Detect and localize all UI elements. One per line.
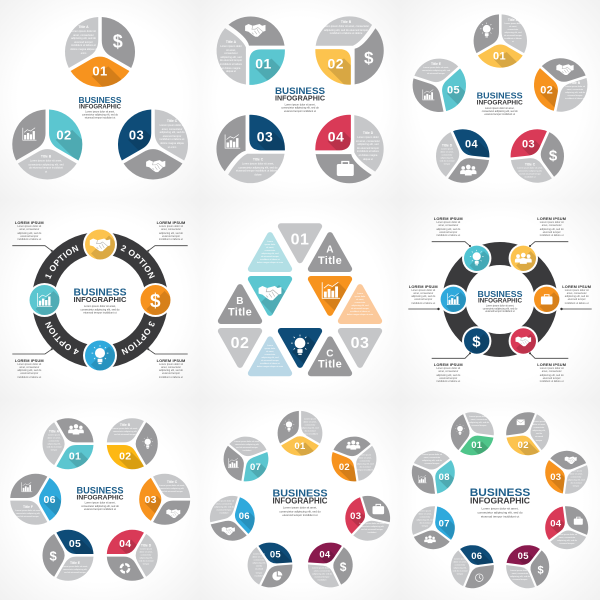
ring labels: 1 OPTION <box>45 245 79 280</box>
circle 01 <box>437 399 515 486</box>
label top left: LOREM IPSUM <box>434 216 463 221</box>
text: sector 2: Lorem ipsum dolor sit amet, consectetur adipiscing elit, sed do eiusmod tempor incididunt <box>356 455 373 472</box>
heading <box>272 489 328 517</box>
heading: INFOGRAPHIC <box>76 494 124 501</box>
circle 01: 01 <box>493 51 506 63</box>
circle 02 <box>311 419 399 509</box>
circle 01: 01 <box>471 440 483 451</box>
text: orange triangle: adipiscing elit, sed <box>352 305 368 307</box>
label left: Lorem ipsum dolor sit amet, consectetur adipiscing elit, sed do eiusmod tempor incididunt ut labore et <box>411 288 435 305</box>
text: Title A: Title A <box>226 40 236 44</box>
label left: LOREM IPSUM <box>409 284 438 288</box>
triangle A: Title <box>318 255 342 267</box>
text: orange triangle <box>347 292 373 316</box>
label bottom left: Lorem ipsum dolor sit amet, consectetur adipiscing elit, sed do eiusmod tempor incididunt ut labore et <box>17 362 41 379</box>
triangle light blue <box>251 339 289 373</box>
heading <box>275 86 325 113</box>
text: blue triangle: ipsum dolor <box>265 348 275 350</box>
label bottom right: LOREM IPSUM <box>537 362 566 367</box>
text: blue triangle: incididunt ut labore et <box>260 363 280 365</box>
heading: INFOGRAPHIC <box>477 100 523 107</box>
heading <box>478 289 523 313</box>
triangle light orange <box>341 287 379 321</box>
node: dollar <box>140 283 170 317</box>
text: Title B: Title B <box>341 20 351 24</box>
text: Title C: Lorem ipsum dolor sit amet, consectetur adipiscing elit, sed do eiusmod tempor incididunt ut <box>517 168 543 178</box>
text: Title D: Lorem ipsum dolor sit amet, consectetur adipiscing elit, sed do eiusmod tempor incididunt ut labore et dolore magna aliqua ut <box>356 136 380 160</box>
heading: Lorem ipsum dolor sit amet, <box>283 506 317 510</box>
label bottom left <box>15 358 44 379</box>
text: Title A: Lorem ipsum dolor sit amet, consectetur adipiscing elit, sed do eiusmod tempor incididunt ut labore et dolore magna aliqua ut enim <box>70 30 97 54</box>
circle 03: 03 <box>350 511 361 522</box>
text: teal triangle <box>257 240 283 264</box>
heading: BUSINESS <box>478 289 523 299</box>
text: orange triangle: do eiusmod tempor <box>351 308 369 310</box>
circle 01: 01 <box>255 56 272 72</box>
text: Title C: Title C <box>167 119 177 123</box>
label top left <box>15 220 44 241</box>
heading: INFOGRAPHIC <box>272 496 328 505</box>
text: teal triangle: ipsum dolor <box>265 244 275 246</box>
heading <box>78 96 122 119</box>
heading: Lorem ipsum dolor sit amet, <box>84 304 116 308</box>
heading: eiusmod tempor incididunt ut <box>481 514 519 518</box>
ring labels <box>45 245 155 355</box>
heading: eiusmod tempor incididunt ut <box>83 311 117 315</box>
circle 04 <box>315 115 384 183</box>
diagram: five circles <box>412 14 588 183</box>
heading: INFOGRAPHIC <box>478 298 522 305</box>
circle 03 <box>339 485 401 553</box>
text: Title E <box>62 561 88 574</box>
text: Title C: Lorem ipsum dolor sit amet, consectetur adipiscing elit, sed do eiusmod tempor incididunt ut labore et dolore magna aliqua ut enim <box>160 124 184 148</box>
text: orange triangle: Lorem <box>357 293 363 295</box>
circle 03: 03 <box>550 472 561 483</box>
circle 02: 02 <box>339 462 350 473</box>
node: bulb <box>83 340 117 370</box>
text: sector 5: Lorem ipsum dolor sit amet, consectetur adipiscing elit, sed do eiusmod tempor incididunt <box>252 554 266 577</box>
label top left: Lorem ipsum dolor sit amet, consectetur adipiscing elit, sed do eiusmod tempor incididunt ut labore et <box>17 225 41 241</box>
label bottom right <box>537 362 566 383</box>
panel: six node ring <box>400 200 600 400</box>
label right: LOREM IPSUM <box>562 284 591 288</box>
triangle A: A <box>326 244 334 255</box>
circle 05 <box>24 510 121 600</box>
triangle 03: 03 <box>351 335 369 352</box>
diagram: three circles <box>12 17 188 180</box>
text: blue triangle: do eiusmod tempor <box>261 360 279 362</box>
text: orange triangle: incididunt ut labore et <box>350 311 370 313</box>
text: Title C <box>159 480 185 493</box>
text: blue triangle: Lorem <box>267 345 273 347</box>
diagram: triangles <box>218 223 382 376</box>
label bottom left <box>434 362 463 383</box>
circle 01: 01 <box>294 441 306 452</box>
text: Title D: Lorem ipsum dolor sit amet, consectetur adipiscing elit, sed do eiusmod tempor <box>440 148 454 166</box>
text: sector 1: Lorem ipsum dolor sit amet, consectetur adipiscing elit, sed do eiusmod tempor incididunt <box>302 419 318 436</box>
circle 03: 03 <box>257 129 273 145</box>
circle 01: $ <box>113 31 123 51</box>
heading: Lorem ipsum dolor sit amet, <box>85 111 115 114</box>
panel: five circles <box>400 0 600 200</box>
text: Title B <box>112 423 138 436</box>
node: briefcase <box>534 284 560 314</box>
circle 05: $ <box>537 564 544 576</box>
circle 02 <box>534 58 588 112</box>
circle 02: 02 <box>540 84 553 96</box>
text: Title C: Title C <box>525 162 535 166</box>
text: Title C: Lorem ipsum dolor sit amet, consectetur adipiscing elit, sed do eiusmod tempor incididunt ut labore et dolore <box>236 162 280 176</box>
circle 03 <box>139 466 196 532</box>
heading: INFOGRAPHIC <box>275 94 325 103</box>
label bottom right: LOREM IPSUM <box>157 358 185 362</box>
text: sector 1: Lorem ipsum dolor sit amet, consectetur adipiscing elit, sed do eiusmod tempor <box>469 416 489 427</box>
text: Title A: Title A <box>49 430 59 434</box>
circle 03: $ <box>549 147 558 164</box>
heading: INFOGRAPHIC <box>74 295 127 304</box>
label bottom left: Lorem ipsum dolor sit amet, consectetur adipiscing elit, sed do eiusmod tempor incididunt ut labore et <box>436 367 460 383</box>
text: orange triangle: consectetur <box>355 302 365 304</box>
text: Title E <box>422 62 450 75</box>
diagram: eight circles <box>412 412 588 588</box>
circle 05: 05 <box>447 84 460 96</box>
circle 04: 04 <box>465 139 478 151</box>
node: people <box>508 244 538 273</box>
label top right: LOREM IPSUM <box>537 216 566 221</box>
text: sector 3: Lorem ipsum dolor sit amet, consectetur adipiscing elit, sed do eiusmod tempor incididunt <box>359 523 385 534</box>
panel: six circles <box>0 400 200 600</box>
text: blue triangle: sit amet, <box>266 351 274 353</box>
text: sector 6: Lorem ipsum dolor sit amet, consectetur adipiscing elit, sed do eiusmod tempor <box>453 559 467 576</box>
text: orange triangle: dolore magna aliqua ut enim <box>347 314 373 316</box>
label bottom left: LOREM IPSUM <box>15 358 44 362</box>
triangle 03 <box>341 331 379 365</box>
circle 01: 01 <box>69 451 81 463</box>
text: teal triangle: consectetur <box>265 250 275 252</box>
diagram: six node ring <box>408 241 592 359</box>
text: sector 3: Lorem ipsum dolor sit amet, consectetur adipiscing elit, sed do eiusmod tempor <box>568 471 584 488</box>
circle 05 <box>232 528 314 600</box>
triangle 02 <box>221 331 259 365</box>
text: teal triangle: Lorem <box>267 241 273 243</box>
heading: Lorem ipsum dolor sit amet, <box>285 103 316 106</box>
label top left: Lorem ipsum dolor sit amet, consectetur adipiscing elit, sed do eiusmod tempor incididunt ut labore et <box>436 221 460 237</box>
label bottom right <box>156 358 185 379</box>
circle 03: 03 <box>145 494 157 506</box>
heading: consectetur adipiscing elit, sed do <box>279 509 321 513</box>
circle 02: 02 <box>56 128 72 143</box>
triangle 01 <box>281 226 319 260</box>
circle 05 <box>494 536 563 600</box>
text: Title B <box>323 20 369 35</box>
node: chart <box>440 284 466 314</box>
text: Title B: Lorem ipsum dolor sit amet, consectetur adipiscing elit, sed do eiusmod tempor incididunt ut labore et <box>565 86 585 100</box>
circle 01: 01 <box>92 64 108 79</box>
triangle C: C <box>326 349 334 360</box>
triangle C <box>311 339 349 373</box>
circle 03 <box>118 110 188 180</box>
label right <box>562 284 591 305</box>
heading: consectetur adipiscing elit, sed do <box>81 505 119 508</box>
text: Title C <box>517 162 543 178</box>
heading: Lorem ipsum dolor sit amet, <box>481 506 519 510</box>
text: blue triangle: dolore magna aliqua ut enim <box>257 366 283 368</box>
text: Title D: Lorem ipsum dolor sit amet, consectetur adipiscing elit, sed do eiusmod tempor <box>139 548 153 566</box>
text: Title C: Title C <box>167 480 177 484</box>
label top right: Lorem ipsum dolor sit amet, consectetur adipiscing elit, sed do eiusmod tempor incididunt ut labore et <box>540 221 564 237</box>
circle 04 <box>436 129 490 183</box>
label bottom right: Lorem ipsum dolor sit amet, consectetur adipiscing elit, sed do eiusmod tempor incididunt ut labore et <box>540 367 564 383</box>
heading: Lorem ipsum dolor sit amet, <box>486 305 515 308</box>
circle 02 <box>315 16 384 85</box>
label bottom left: LOREM IPSUM <box>434 362 463 367</box>
node: dollar: $ <box>472 333 481 350</box>
circle 01 <box>271 406 329 471</box>
circle 04: 04 <box>319 549 331 560</box>
text: Title F: Title F <box>23 505 33 509</box>
label top left <box>434 216 463 237</box>
heading <box>477 90 523 116</box>
circle 01 <box>65 17 135 87</box>
label bottom right: Lorem ipsum dolor sit amet, consectetur adipiscing elit, sed do eiusmod tempor incididunt ut labore et <box>159 362 183 379</box>
circle 04 <box>295 532 368 600</box>
arrow lines <box>408 242 592 358</box>
text: Title B: Title B <box>41 154 51 158</box>
triangle navy bulb <box>278 328 322 368</box>
arrow lines <box>12 246 188 354</box>
circle 07: 07 <box>250 462 261 473</box>
label top left: LOREM IPSUM <box>15 220 44 225</box>
heading: BUSINESS <box>78 96 122 105</box>
text: Title B: Lorem ipsum dolor sit amet, consectetur adipiscing elit, sed do eiusmod tempor <box>112 428 138 436</box>
circle 03 <box>532 437 600 513</box>
text: teal triangle: sit amet, <box>266 247 274 249</box>
triangle teal handshake <box>248 276 292 316</box>
heading: consectetur adipiscing elit, sed do <box>281 107 319 110</box>
heading: consectetur adipiscing elit, sed do <box>477 510 523 514</box>
text: orange triangle: ipsum dolor <box>355 296 365 298</box>
triangle B: Title <box>228 307 252 319</box>
triangle 01: 01 <box>291 231 309 248</box>
heading <box>470 487 530 518</box>
circle 04: $ <box>340 560 347 574</box>
panel: triangles <box>200 200 400 400</box>
circle 02: 02 <box>518 440 529 451</box>
heading: Lorem ipsum dolor sit amet, <box>85 502 116 505</box>
text: sector 4: Lorem ipsum dolor sit amet, consectetur adipiscing elit, sed do eiusmod tempor incididunt <box>312 567 332 582</box>
circle 01 <box>24 400 124 508</box>
circle 06: 06 <box>471 551 482 562</box>
heading: eiusmod tempor incididunt ut <box>284 110 316 113</box>
text: Title E: Title E <box>70 561 80 565</box>
circle 04: 04 <box>550 519 562 530</box>
circle 08 <box>398 437 486 515</box>
heading: BUSINESS <box>272 489 328 500</box>
heading: eiusmod tempor incididunt ut <box>84 508 116 511</box>
text: orange triangle: sit amet, <box>356 299 364 301</box>
circle 06: 06 <box>44 494 56 506</box>
heading <box>76 485 124 511</box>
text: Title F: Lorem ipsum dolor sit amet, consectetur adipiscing elit, sed do eiusmod tempor <box>15 510 41 518</box>
circle 01 <box>474 14 527 68</box>
circle 08: 08 <box>439 472 450 483</box>
text: sector 2: Lorem ipsum dolor sit amet, consectetur adipiscing elit, sed do eiusmod tempor <box>532 421 546 442</box>
text: Title A: Lorem ipsum dolor sit amet, consectetur adipiscing elit, sed do eiusmod tempor incididunt ut labore et <box>504 23 522 43</box>
heading: eiusmod tempor incididunt ut <box>85 116 116 119</box>
text: sector 7: Lorem ipsum dolor sit amet, consectetur adipiscing elit, sed do eiusmod tempor incididunt <box>234 441 260 452</box>
diagram: six circles <box>10 418 190 581</box>
text: teal triangle: incididunt ut labore et <box>260 259 280 261</box>
triangle C: Title <box>318 359 342 371</box>
heading: consectetur adipiscing elit, sed do <box>81 307 120 311</box>
panel: eight circles <box>400 400 600 600</box>
circle 02: 02 <box>119 451 131 463</box>
label top right <box>537 216 566 237</box>
text: Title A: Lorem ipsum dolor sit amet, consectetur adipiscing elit, sed do eiusmod tempor incididunt ut labore et dolore magna aliqua ut <box>220 45 242 73</box>
text: sector 7: Lorem ipsum dolor sit amet, consectetur adipiscing elit, sed do eiusmod tempor <box>416 511 433 528</box>
heading: INFOGRAPHIC <box>470 495 530 505</box>
heading: consectetur adipiscing elit, sed do <box>482 110 518 113</box>
heading: BUSINESS <box>275 86 325 97</box>
text: Title C: Lorem ipsum dolor sit amet, consectetur adipiscing elit, sed do eiusmod tempor <box>159 485 185 493</box>
text: Title E: Lorem ipsum dolor sit amet, consectetur adipiscing elit, sed do eiusmod tempor <box>62 566 88 574</box>
heading <box>74 288 127 315</box>
circle 07 <box>398 488 481 568</box>
text: Title B: Lorem ipsum dolor sit amet, consectetur adipiscing elit, sed do eiusmod tempor incididunt ut <box>28 159 64 173</box>
circle 06 <box>199 481 278 555</box>
circle 05: $ <box>49 549 57 564</box>
panel: option ring <box>0 200 200 400</box>
text: blue triangle <box>257 344 283 368</box>
circle 01 <box>216 16 285 85</box>
circle 07 <box>206 419 303 513</box>
text: Title B: Title B <box>570 81 580 85</box>
circle 03: 03 <box>129 128 144 143</box>
node: dollar <box>462 326 492 354</box>
text: sector 8: Lorem ipsum dolor sit amet, consectetur adipiscing elit, sed do eiusmod tempor <box>422 454 442 465</box>
circle 04: 04 <box>328 129 344 145</box>
triangle orange chart <box>308 276 352 316</box>
heading: consectetur adipiscing elit, sed do <box>82 114 119 116</box>
triangle B <box>221 287 259 321</box>
circle 03: 03 <box>522 139 535 151</box>
node: handshake <box>508 326 538 354</box>
circle 02: $ <box>364 48 374 67</box>
text: Title A: Title A <box>508 18 518 22</box>
circle 02 <box>488 399 569 480</box>
label left <box>409 284 438 305</box>
node: dollar: $ <box>150 291 161 312</box>
heading: eiusmod tempor incididunt ut <box>282 513 318 517</box>
heading: BUSINESS <box>470 487 530 499</box>
label top right: Lorem ipsum dolor sit amet, consectetur adipiscing elit, sed do eiusmod tempor incididunt ut labore et <box>159 225 183 241</box>
text: teal triangle: do eiusmod tempor <box>261 256 279 258</box>
text: sector 4: Lorem ipsum dolor sit amet, consectetur adipiscing elit, sed do eiusmod tempor <box>557 534 577 545</box>
text: Title A: Lorem ipsum dolor sit amet, consectetur adipiscing elit, sed do eiusmod tempor <box>47 434 61 452</box>
text: Title B: Lorem ipsum dolor sit amet, consectetur adipiscing elit, sed do eiusmod tempor incididunt ut labore et dolore <box>323 25 369 35</box>
label top right <box>156 220 185 241</box>
node: handshake <box>83 230 117 260</box>
node: bulb <box>462 244 492 273</box>
text: blue triangle: adipiscing elit, sed <box>262 357 278 359</box>
circle 05: 05 <box>518 551 529 562</box>
label top right: LOREM IPSUM <box>157 220 185 225</box>
text: sector 6: Lorem ipsum dolor sit amet, consectetur adipiscing elit, sed do eiusmod tempor incididunt <box>214 500 234 515</box>
triangle light teal <box>251 235 289 269</box>
circle 04: 04 <box>119 538 131 550</box>
text: teal triangle: dolore magna aliqua ut enim <box>257 262 283 264</box>
text: Title E: Lorem ipsum dolor sit amet, consectetur adipiscing elit, sed do eiusmod tempor <box>422 67 450 75</box>
panel: three circles <box>0 0 200 200</box>
text: Title C: Title C <box>253 157 263 161</box>
text: Title E: Title E <box>431 62 441 66</box>
heading: consectetur adipiscing elit, sed do <box>483 307 518 310</box>
circle 05: 05 <box>69 538 81 550</box>
ring <box>454 254 546 346</box>
text: teal triangle: adipiscing elit, sed <box>262 253 278 255</box>
circle 04 <box>91 517 176 599</box>
triangle A <box>311 235 349 269</box>
heading: BUSINESS <box>76 485 124 495</box>
panel: seven circles <box>200 400 400 600</box>
text: blue triangle: consectetur <box>265 354 275 356</box>
triangle 02: 02 <box>231 335 249 352</box>
diagram: option ring <box>12 230 188 370</box>
circle 04 <box>536 494 600 563</box>
heading: Lorem ipsum dolor sit amet, <box>485 107 515 110</box>
ring labels: 3 OPTION <box>121 321 155 355</box>
circle 02 <box>12 110 82 180</box>
panel: four circles <box>200 0 400 200</box>
ring <box>43 243 157 357</box>
circle 06 <box>437 533 513 600</box>
ring labels: 4 OPTION <box>45 322 79 354</box>
circle 03 <box>216 114 285 184</box>
heading: INFOGRAPHIC <box>79 105 122 111</box>
circle 05: 05 <box>270 549 281 560</box>
diagram: seven circles <box>210 410 390 588</box>
text: sector 5: Lorem ipsum dolor sit amet, consectetur adipiscing elit, sed do eiusmod tempor <box>510 570 530 581</box>
circle 07: 07 <box>439 519 450 530</box>
circle 02: 02 <box>327 56 344 72</box>
text: Title D: Title D <box>141 544 151 548</box>
circle 06 <box>4 466 81 532</box>
heading: BUSINESS <box>74 288 127 299</box>
circle 03 <box>510 129 564 183</box>
text: Title D: Title D <box>363 131 373 135</box>
text: Title F <box>15 505 41 518</box>
heading: BUSINESS <box>477 90 523 100</box>
text: Title D: Title D <box>442 144 452 148</box>
ring labels: 2 OPTION <box>120 245 155 279</box>
circle 05 <box>412 58 466 112</box>
triangle B: B <box>236 296 244 307</box>
text: Title B: Title B <box>120 423 130 427</box>
text: Title A: Title A <box>78 25 89 29</box>
circle 06: 06 <box>239 511 250 522</box>
node: chart <box>30 283 60 317</box>
heading: eiusmod tempor incididunt ut <box>485 310 515 313</box>
label right: Lorem ipsum dolor sit amet, consectetur adipiscing elit, sed do eiusmod tempor incididunt ut labore et <box>565 288 589 305</box>
diagram: four circles <box>216 16 384 184</box>
circle 02 <box>83 400 184 501</box>
heading: eiusmod tempor incididunt ut <box>484 113 515 116</box>
